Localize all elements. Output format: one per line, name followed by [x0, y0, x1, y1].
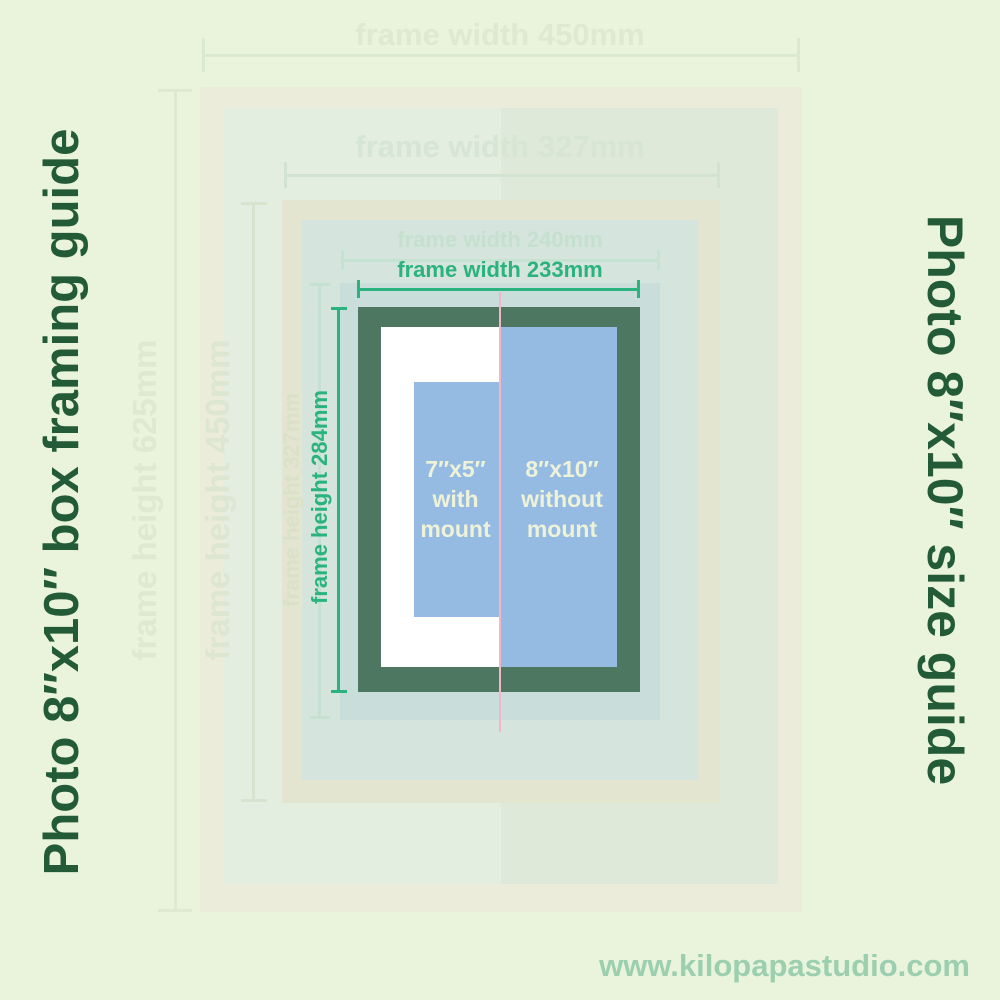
- label: 8x10 without mount: [521, 456, 603, 542]
- photo: 7x5 with mount: [414, 382, 501, 617]
- label: 8x10 without mount: 8″x10″: [525, 456, 599, 482]
- title: left vertical: Photo 8″x10″ box framing guide: [35, 129, 89, 875]
- panel: frame 327mm: [282, 200, 720, 803]
- footer: website: www.kilopapastudio.com: [599, 948, 970, 983]
- panel: outer frame 450mm: [200, 87, 802, 912]
- label: 8x10 without mount: mount: [527, 516, 597, 542]
- panel: frame 327 inner: [302, 220, 698, 780]
- label: 7x5 with mount: 7″x5″: [425, 456, 486, 482]
- label: 7x5 with mount: mount: [420, 516, 491, 542]
- label: 7x5 with mount: with: [432, 486, 478, 512]
- dimension: height 327: [310, 283, 330, 719]
- label: width 450: frame width 450mm: [355, 17, 645, 52]
- dimension: width 233: [357, 280, 640, 298]
- panel: frame 240mm: [340, 283, 660, 720]
- label: 7x5 with mount: [420, 456, 491, 542]
- title: right vertical: Photo 8″x10″ size guide: [917, 215, 973, 785]
- dimension: width 240: [341, 250, 660, 270]
- label: width 327: frame width 327mm: [355, 129, 645, 164]
- photo: 8x10 without mount: [501, 327, 617, 667]
- mat: white: [381, 327, 501, 667]
- dimension: width 450: [202, 38, 800, 72]
- dimension: height 450: [241, 202, 267, 802]
- label: height 625: frame height 625mm: [126, 340, 163, 660]
- label: height 450: frame height 450mm: [199, 340, 236, 660]
- dimension: width 327: [284, 162, 720, 188]
- label: height 327: frame height 327mm: [279, 393, 304, 607]
- dimension: height 284: [331, 307, 347, 693]
- panel: outer inner area: [223, 108, 778, 884]
- label: height 284: frame height 284mm: [307, 390, 332, 604]
- panel: frame 233mm dark: [358, 307, 640, 692]
- label: width 233: frame width 233mm: [397, 257, 603, 282]
- divider line pink: [499, 292, 501, 732]
- label: 8x10 without mount: without: [521, 486, 603, 512]
- dimension: height 625: [158, 89, 192, 912]
- label: width 240: frame width 240mm: [397, 227, 603, 252]
